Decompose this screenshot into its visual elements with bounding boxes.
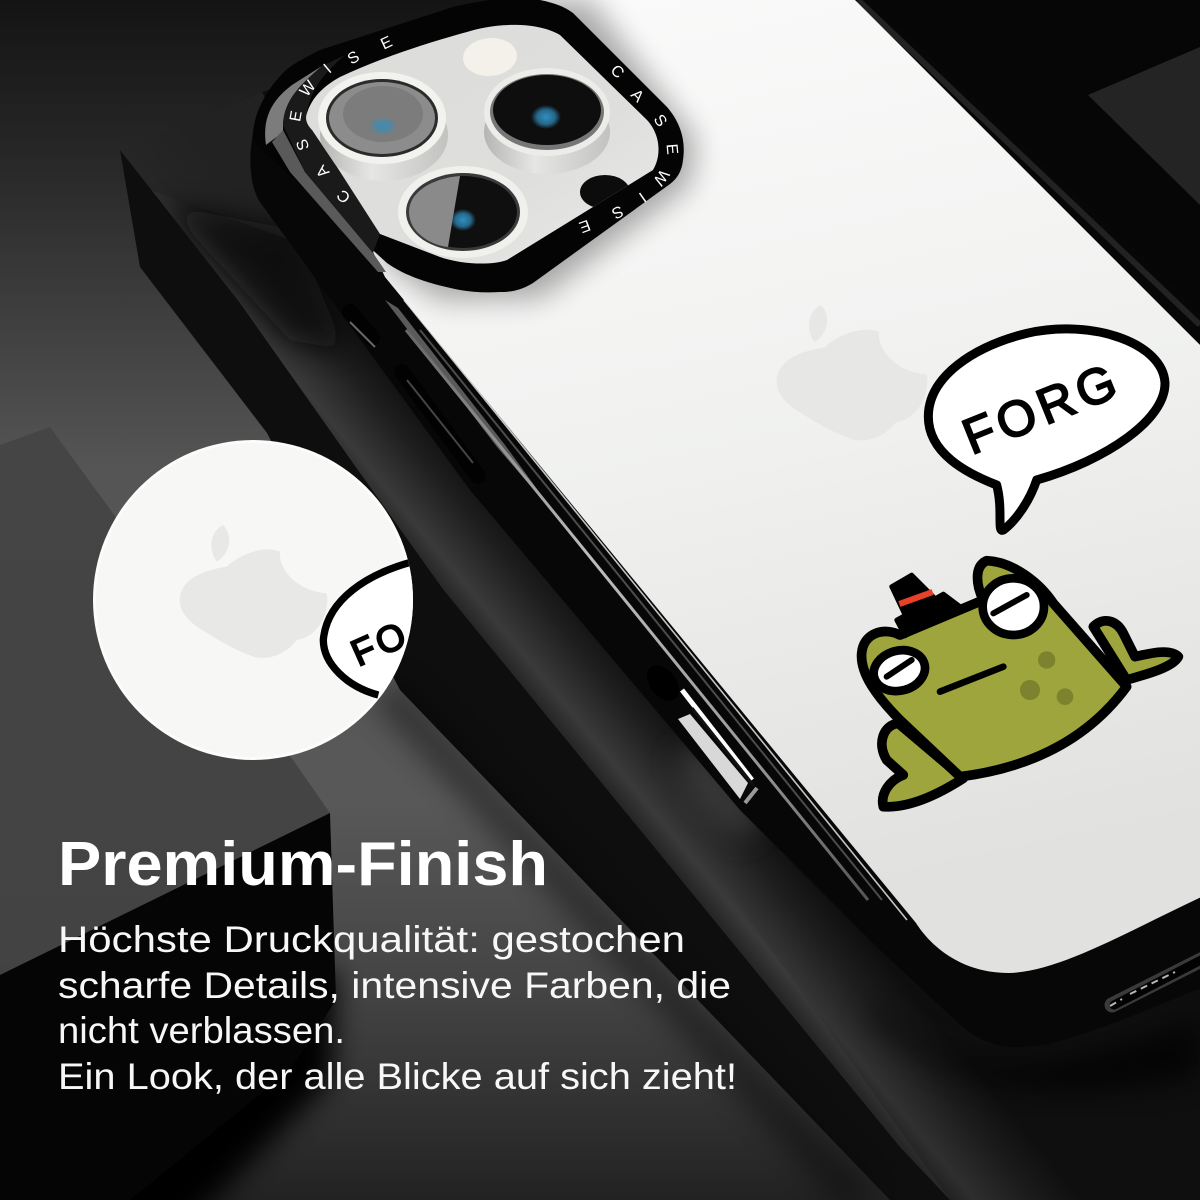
phone case	[250, 0, 1200, 1047]
side buttons	[350, 312, 1200, 1006]
CASEWISE lettering	[287, 33, 680, 235]
CASEWISE lettering: S	[609, 202, 626, 222]
heading: Premium-Finish	[58, 830, 548, 899]
CASEWISE lettering: E	[577, 216, 592, 235]
microphone hole	[580, 175, 630, 209]
CASEWISE lettering: C	[607, 62, 627, 82]
CASEWISE lettering: E	[663, 143, 680, 155]
silver button	[678, 714, 748, 799]
phone shadow	[860, 1010, 1200, 1090]
frog body	[862, 561, 1127, 777]
CASEWISE lettering: W	[297, 77, 320, 100]
frog left leg	[882, 723, 963, 807]
frog mouth	[940, 667, 1003, 692]
charging port	[1112, 958, 1200, 1005]
flash	[463, 38, 517, 76]
case chrome strip	[385, 300, 545, 500]
CASEWISE lettering: I	[635, 189, 649, 205]
CASEWISE lettering: C	[334, 186, 354, 206]
translucent grey strip along lower-left	[272, 130, 386, 272]
translucent grey crescent	[265, 66, 322, 145]
frog hat	[892, 575, 959, 636]
magnifier circle: FO	[345, 613, 415, 674]
body text: scharfe Details, intensive Farben, die	[58, 965, 731, 1006]
sticker: FORG speech bubble	[928, 329, 1165, 530]
CASEWISE lettering: S	[345, 48, 363, 68]
frog right leg	[1093, 621, 1178, 680]
camera island	[253, 0, 684, 292]
frog eyes	[869, 578, 1044, 697]
sticker: frog with top hat	[862, 561, 1178, 807]
lens top-right	[484, 68, 610, 174]
CASEWISE lettering: E	[287, 110, 306, 123]
CASEWISE lettering: W	[649, 166, 672, 189]
band with lettering zone	[283, 55, 380, 253]
frog spots	[1020, 651, 1073, 705]
island shadow	[380, 0, 696, 300]
camera glass	[306, 24, 658, 264]
magnified apple logo	[180, 525, 327, 658]
body text: nicht verblassen.	[58, 1010, 345, 1051]
body text	[58, 919, 737, 1097]
lens top-left	[318, 72, 448, 181]
CASEWISE lettering: S	[650, 112, 670, 130]
CASEWISE lettering: I	[321, 61, 335, 77]
body text: Ein Look, der alle Blicke auf sich zieht!	[58, 1056, 737, 1097]
magnifier circle	[93, 440, 417, 760]
sticker: FORG speech bubble: FORG	[955, 353, 1124, 465]
magnified bubble	[327, 562, 413, 696]
CASEWISE lettering: A	[627, 86, 647, 106]
body text: Höchste Druckqualität: gestochen	[58, 919, 685, 960]
CASEWISE lettering: S	[294, 137, 313, 152]
CASEWISE lettering: E	[378, 33, 395, 53]
lens bottom	[398, 166, 528, 258]
CASEWISE lettering: A	[313, 161, 333, 181]
phone back: white print surface	[300, 0, 1200, 973]
icon: apple logo	[777, 305, 927, 440]
